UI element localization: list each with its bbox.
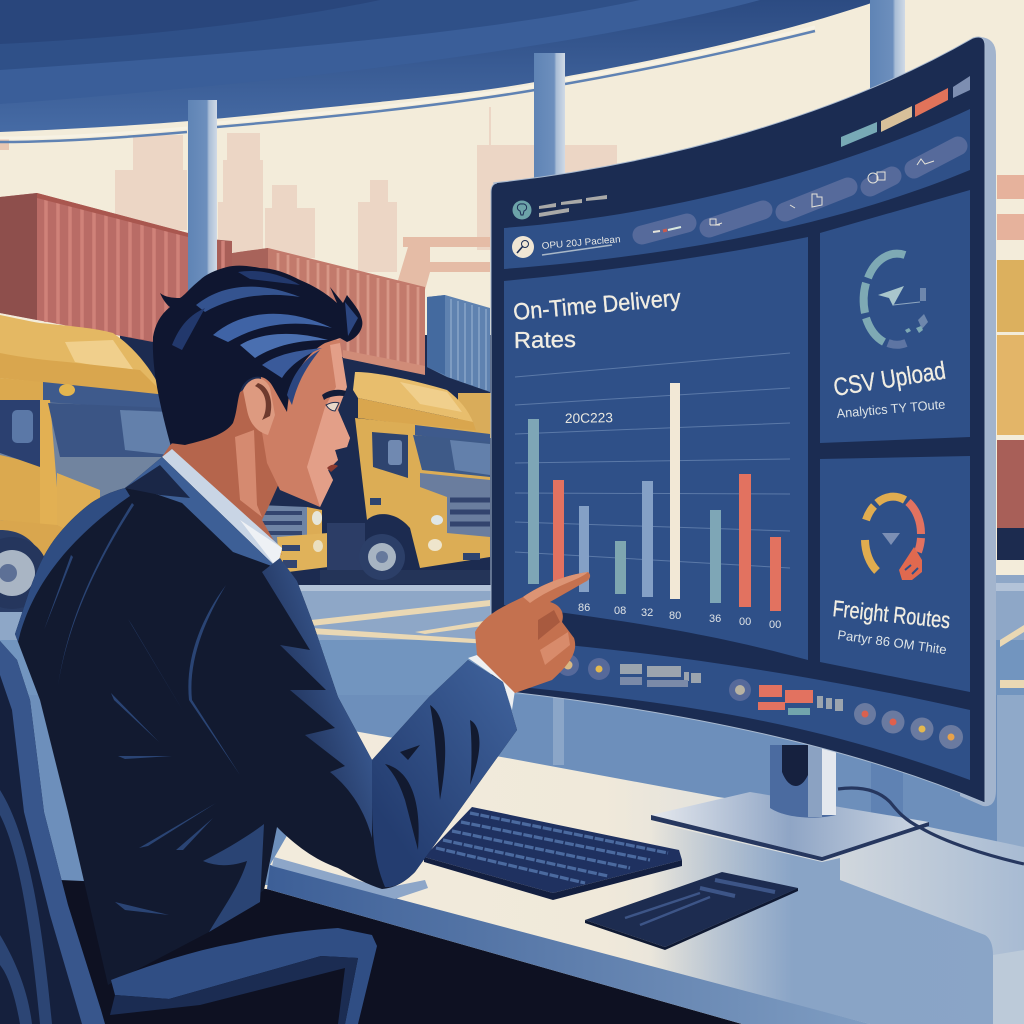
pointing hand [475,572,590,693]
centre yellow truck [320,372,495,584]
shirt cuff [468,655,515,710]
small background truck [258,505,328,573]
monitor back edge [960,37,996,806]
panel: csv upload [820,190,970,443]
icon: csv gauge [864,254,928,345]
icon: freight gauge [865,497,922,580]
nav band [504,109,970,269]
jacket fold streaks [44,503,264,932]
neck [162,390,285,555]
blue container [427,295,490,392]
bar chart axis labels: 00 [769,619,781,631]
face [260,340,350,507]
top status logo [512,195,607,220]
colour legend chips [841,76,970,147]
city skyline [0,107,617,290]
bar chart axis labels [578,602,781,631]
small yellow container [458,393,492,438]
jacket shoulder highlight [262,558,372,838]
chair armrest [111,928,377,1024]
heading: on-time delivery rates [512,284,682,353]
truck side window [0,400,40,467]
truck windshield [48,403,170,457]
elbow shadow [272,857,428,899]
jacket body [15,457,517,985]
chart grid lines [515,353,790,568]
heading: on-time delivery rates: Rates [514,326,576,353]
monitor bezel [491,37,985,803]
bar chart axis labels: 36 [709,613,721,625]
panel: freight routes [820,456,970,692]
left yellow truck [0,315,170,612]
face highlight [307,343,350,507]
dark yard behind trucks [120,335,495,585]
chart year label: 20C223 [565,410,613,426]
truck cab body [0,378,55,527]
keyboard [424,807,682,900]
bar chart axis labels: 80 [669,610,681,622]
bar chart axis labels: 00 [739,616,751,628]
heading: csv upload: CSV Upload [832,357,948,402]
red container stack, left [0,193,232,345]
hair [153,266,362,445]
window frame lines [0,27,815,142]
freight subtitle: Partyr 86 OM Thite [837,627,948,657]
bar chart axis labels: 86 [578,602,590,614]
truck wheel [0,537,48,609]
hair highlights [172,271,358,405]
centre truck wheel [359,534,405,580]
ground and road [0,575,1024,885]
ear [243,378,275,435]
shirt collar [162,449,282,568]
shadow below desk [60,880,742,1024]
jacket sleeve [372,660,517,887]
bar chart [528,383,781,611]
desk [267,730,1024,1024]
panel: on-time delivery rates [504,237,808,660]
lower window mullions [553,695,903,830]
sleeve dark folds [385,705,479,850]
nav pill glyphs [653,159,934,232]
heading: freight routes: Freight Routes [831,595,952,633]
monitor stand neck [770,745,836,818]
containers at right of monitor [997,175,1024,560]
centre truck grille [420,473,490,537]
bar chart axis labels: 08 [614,605,626,617]
eye and brow [322,390,346,472]
nav pills [642,146,958,235]
tablet [585,872,798,950]
monitor cable [838,788,1024,864]
jacket lower sheen [203,824,264,932]
centre truck cab [355,418,490,568]
window columns [188,0,905,295]
control dials [557,654,963,749]
heading: on-time delivery rates: On-Time Delivery [512,284,682,325]
truck roof fairing [0,315,165,395]
bottom control band [510,640,970,780]
truck fender [57,473,100,570]
control bars [620,664,843,715]
ceiling [0,0,880,132]
chair back mesh [0,641,105,1024]
person [15,266,590,985]
monitor stand base [651,792,929,861]
csv subtitle: Analytics TY TOute [836,397,946,421]
bar chart axis labels: 32 [641,607,653,619]
dashboard logo [512,236,534,258]
desk front edge [267,865,870,1024]
truck backing [0,390,170,560]
office chair [0,641,377,1024]
jacket lapel [125,457,277,568]
monitor shadow on desk [650,822,993,1024]
red container, centre [232,248,425,375]
monitor [491,37,996,806]
chair back frame [0,641,105,1024]
dashboard label: OPU 20J Paclean [541,234,621,252]
jacket back edge highlight [15,488,130,642]
